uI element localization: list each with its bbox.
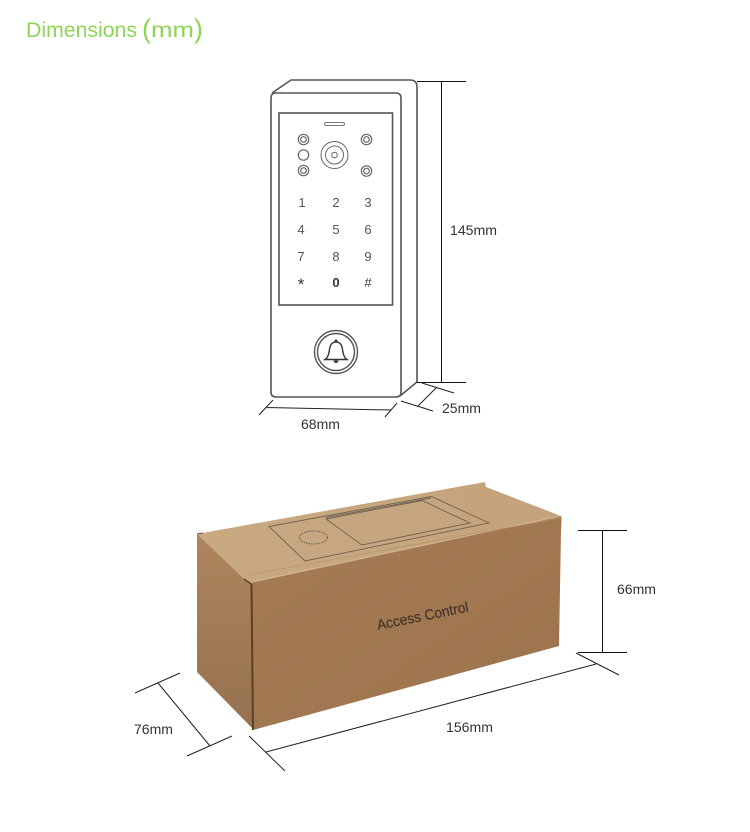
title: Dimensions <box>26 19 137 42</box>
keypad digits: 8 <box>332 249 340 264</box>
dimension: device depth 25mm <box>401 383 481 416</box>
keypad digits: 6 <box>364 222 372 237</box>
keypad digits: 2 <box>332 195 340 210</box>
title: ) <box>194 14 203 44</box>
keypad digits: 7 <box>297 249 305 264</box>
title <box>26 14 203 44</box>
dimension: box height 66mm: 66mm <box>617 582 656 597</box>
keypad digits: 0 <box>332 275 340 290</box>
cardboard box <box>197 482 562 730</box>
dimension: box length 156mm: 156mm <box>446 720 493 735</box>
keypad digits <box>297 195 372 294</box>
device line drawing <box>271 80 417 397</box>
keypad digits: 5 <box>332 222 340 237</box>
keypad digits: 1 <box>298 195 306 210</box>
box edges <box>197 516 560 730</box>
keypad digits: * <box>298 275 305 294</box>
dimension: box length 156mm <box>249 653 619 771</box>
title: ( <box>142 14 151 44</box>
keypad digits: 4 <box>297 222 305 237</box>
dimension: device height 145mm: 145mm <box>450 223 497 238</box>
dimension: device height 145mm <box>417 82 497 382</box>
box left face <box>197 534 254 730</box>
keypad digits: 9 <box>364 249 372 264</box>
keypad digits: 3 <box>364 195 372 210</box>
camera lens <box>321 142 348 168</box>
device body <box>271 80 417 397</box>
title: mm <box>151 19 194 42</box>
doorbell button <box>314 330 358 374</box>
dimension: device width 68mm: 68mm <box>301 417 340 432</box>
speaker slot <box>324 122 344 126</box>
dimension: device width 68mm <box>259 400 397 432</box>
printed device outline on lid <box>269 496 489 561</box>
box front face <box>250 516 562 730</box>
dimension: box width 76mm <box>134 673 232 756</box>
box top face <box>197 482 561 583</box>
dimension: box width 76mm: 76mm <box>134 722 173 737</box>
device screen <box>279 113 392 305</box>
box label: Access Control <box>376 600 470 634</box>
keypad digits: # <box>364 275 372 290</box>
dimension: box height 66mm <box>578 530 656 652</box>
dimension: device depth 25mm: 25mm <box>442 401 481 416</box>
indicator LEDs <box>298 134 372 176</box>
